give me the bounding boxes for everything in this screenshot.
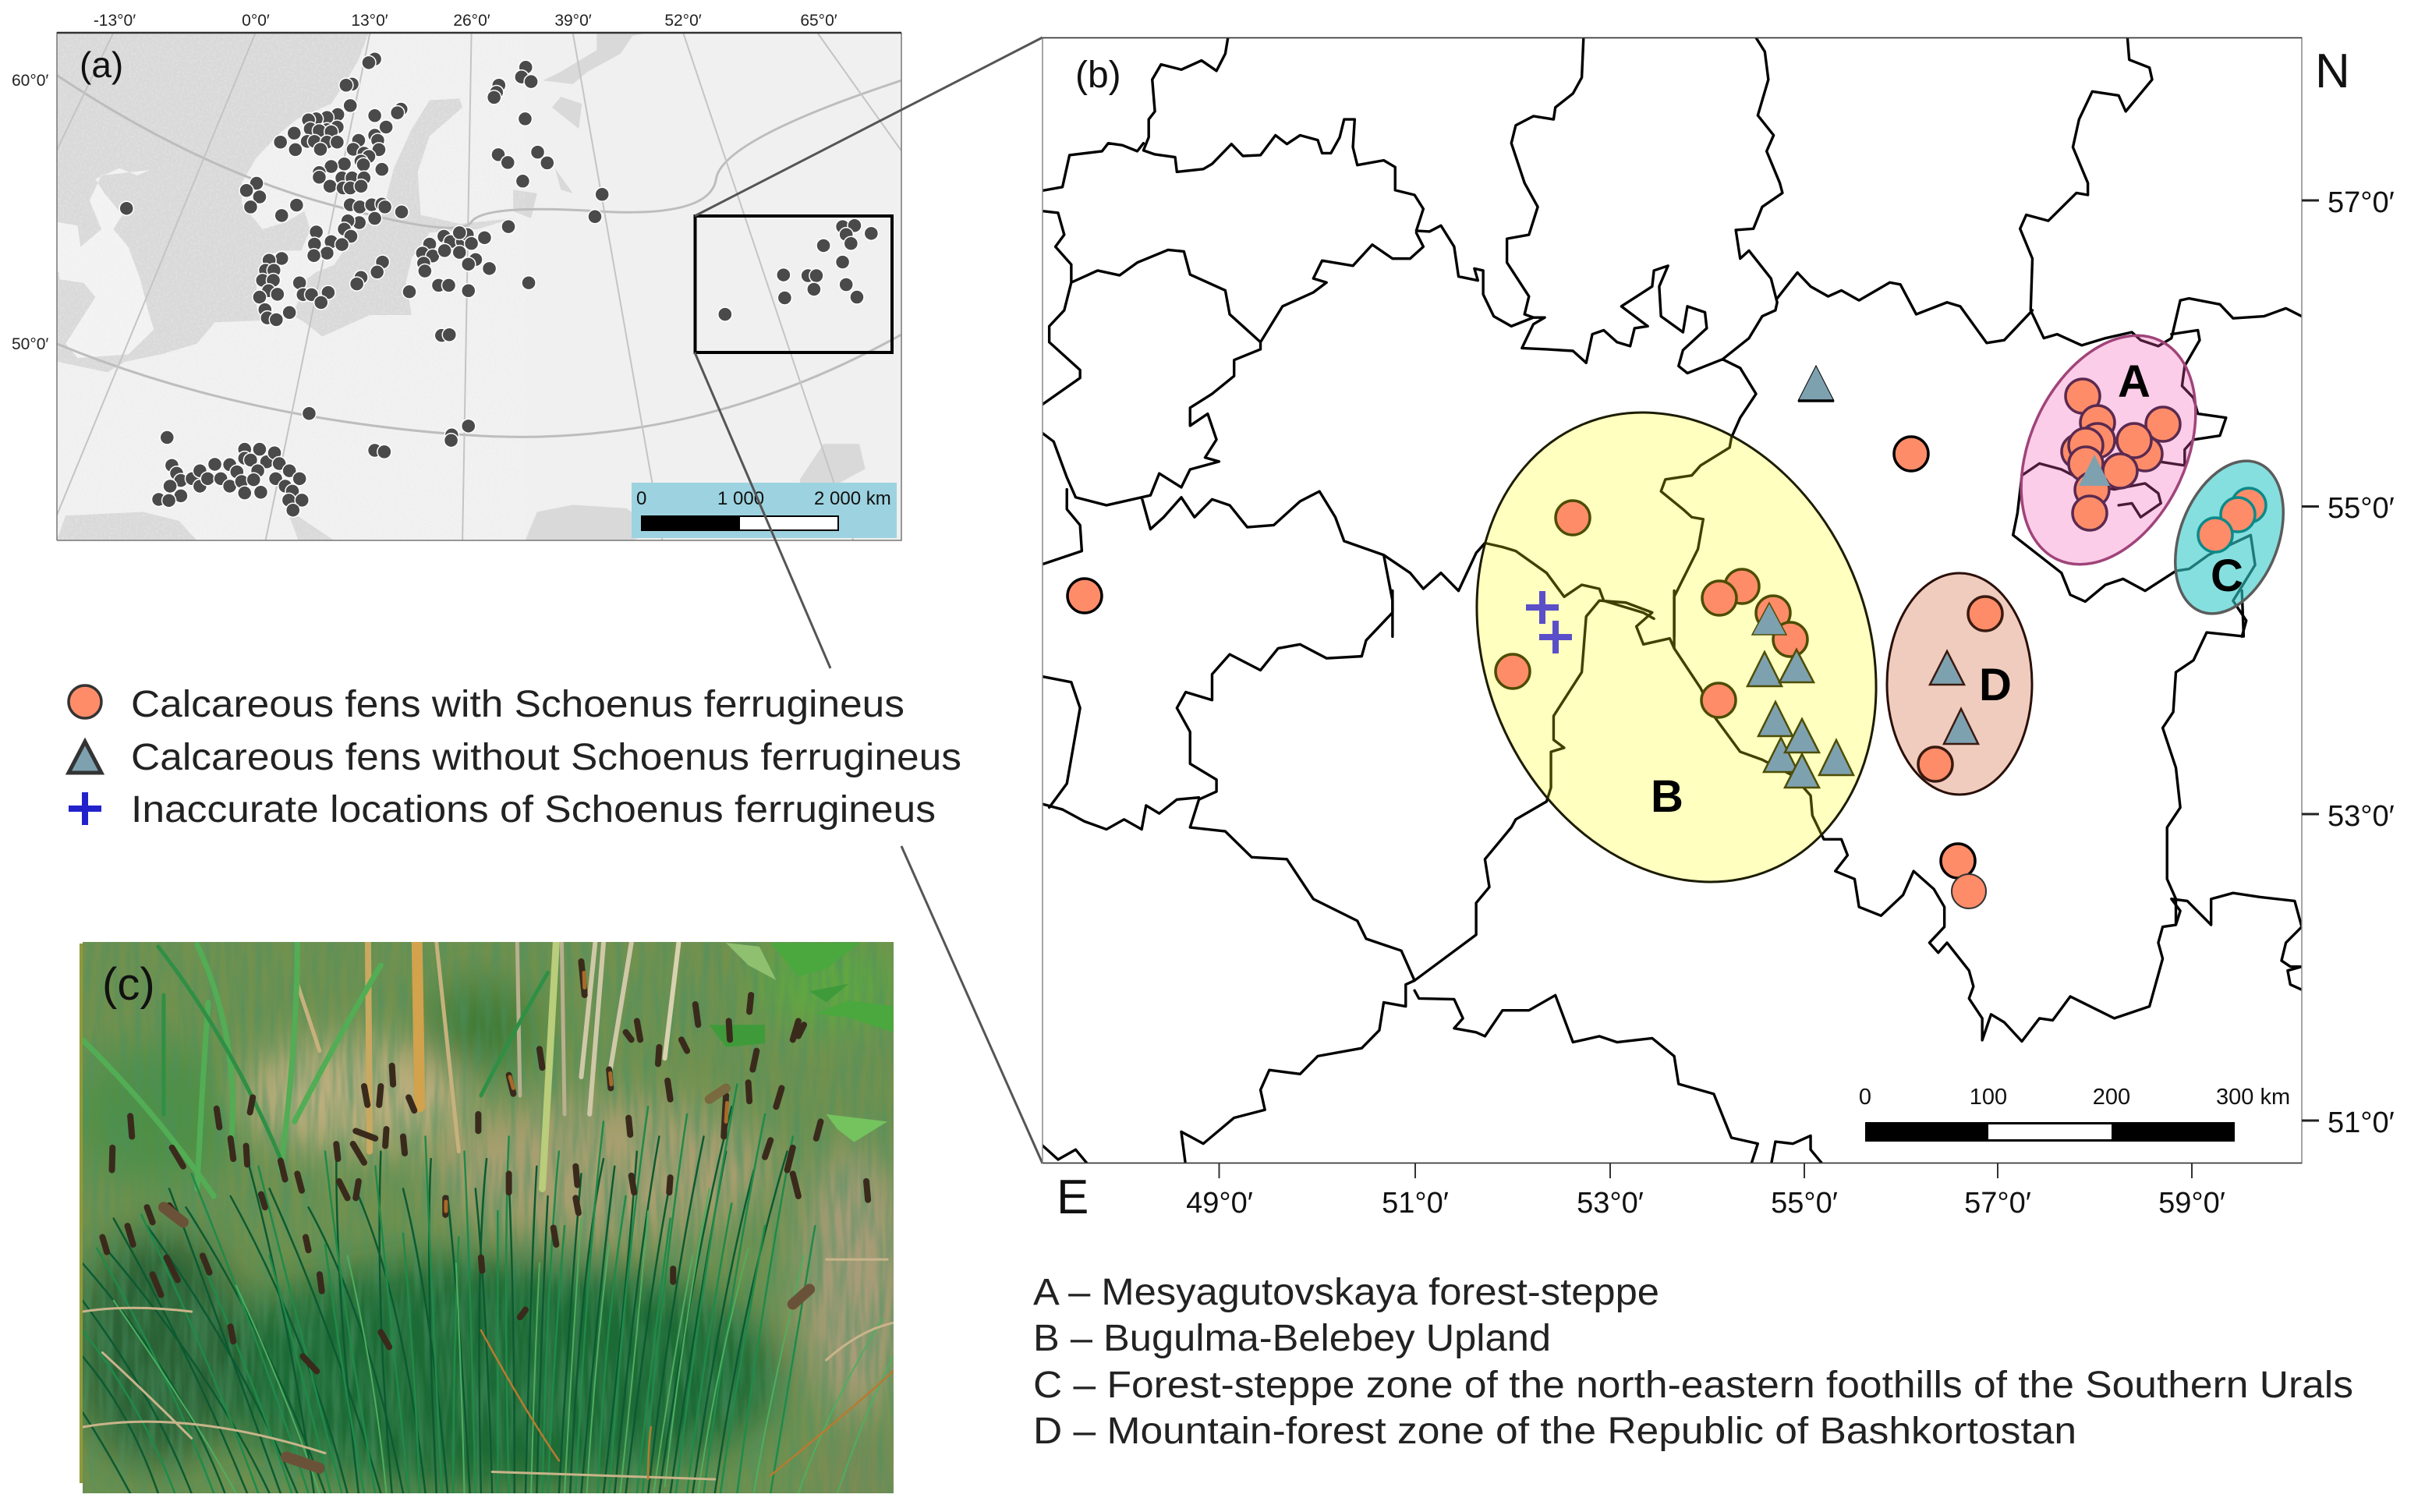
east axis letter: E bbox=[1057, 1170, 1089, 1224]
top longitude labels: 52°0′ bbox=[664, 12, 702, 30]
graticule lines bbox=[57, 33, 901, 540]
bottom longitude ticks and labels: 55°0′ bbox=[1771, 1187, 1838, 1220]
legend: zones A to D: B – Bugulma-Belebey Upland bbox=[1033, 1318, 1551, 1359]
top longitude labels: -13°0′ bbox=[94, 12, 136, 30]
scale bar (b) bbox=[1859, 1085, 2290, 1142]
panel (b) frame bbox=[1043, 37, 2302, 1163]
text: inaccurate locations: Inaccurate locations of Schoenus ferrugineus bbox=[131, 789, 936, 830]
legend: zones A to D: D – Mountain-forest zone of the Republic of Bashkortostan bbox=[1033, 1411, 2076, 1452]
panel (c) label: (c) bbox=[102, 959, 155, 1010]
zone letter labels bbox=[1651, 356, 2243, 822]
bottom longitude ticks and labels: 53°0′ bbox=[1577, 1187, 1644, 1220]
zone letter labels: C bbox=[2211, 551, 2243, 601]
leaves top right bbox=[770, 943, 893, 1032]
fen sites without Schoenus ferrugineus bbox=[1747, 366, 2110, 788]
tussock blades bbox=[83, 1107, 788, 1493]
left latitude labels: 50°0′ bbox=[12, 335, 48, 353]
zone B ellipse bbox=[1475, 412, 1878, 883]
icon: blue-grey triangle bbox=[69, 742, 101, 773]
scale bar (b): 100 bbox=[1970, 1085, 2007, 1110]
inaccurate location markers bbox=[1526, 591, 1572, 653]
fen sites with Schoenus ferrugineus bbox=[1067, 379, 2266, 908]
right latitude ticks and labels: 57°0′ bbox=[2328, 186, 2395, 219]
panel (a): Europe overview map bbox=[12, 12, 901, 540]
north axis letter: N bbox=[2315, 44, 2350, 98]
occurrence dots bbox=[119, 52, 878, 517]
scale bar (a): 1 000 bbox=[717, 488, 764, 509]
bottom longitude ticks and labels: 57°0′ bbox=[1964, 1187, 2031, 1220]
bottom longitude ticks and labels: 51°0′ bbox=[1382, 1187, 1449, 1220]
top longitude labels: 65°0′ bbox=[800, 12, 837, 30]
legend: zones A to D bbox=[1033, 1272, 2353, 1452]
bottom longitude ticks and labels: 49°0′ bbox=[1186, 1187, 1253, 1220]
connector lines from inset to panel b bbox=[695, 37, 1043, 1163]
administrative boundaries bbox=[1040, 37, 2302, 1166]
seed heads bbox=[102, 961, 868, 1371]
top longitude labels: 0°0′ bbox=[242, 12, 270, 30]
reed stems bbox=[368, 943, 370, 1152]
scale bar (b): 200 bbox=[2093, 1085, 2130, 1110]
panel (c): photo of Schoenus ferrugineus tussock bbox=[73, 941, 908, 1512]
tan litter stems bbox=[83, 1259, 893, 1479]
text: calcareous fens without: Calcareous fens without Schoenus ferrugineus bbox=[131, 737, 961, 778]
scale bar (b): 0 bbox=[1859, 1085, 1871, 1110]
panel (b): regional map bbox=[1040, 37, 2395, 1224]
legend: zones A to D: A – Mesyagutovskaya forest-steppe bbox=[1033, 1272, 1659, 1313]
top longitude labels: 26°0′ bbox=[453, 12, 490, 30]
bottom longitude ticks and labels: 59°0′ bbox=[2158, 1187, 2225, 1220]
zone C ellipse bbox=[2174, 459, 2285, 615]
inset rectangle bbox=[696, 216, 892, 352]
top longitude labels: 13°0′ bbox=[351, 12, 388, 30]
bottom longitude ticks and labels bbox=[1186, 1163, 2225, 1220]
icon: blue plus bbox=[69, 792, 101, 825]
zone letter labels: B bbox=[1651, 771, 1683, 822]
icon: orange circle bbox=[69, 685, 101, 718]
panel (a) label: (a) bbox=[80, 44, 123, 85]
scale bar (b): 300 km bbox=[2216, 1085, 2290, 1110]
scale bar (a) bbox=[632, 483, 897, 538]
right latitude ticks and labels: 55°0′ bbox=[2328, 492, 2395, 525]
left latitude labels: 60°0′ bbox=[12, 72, 48, 90]
scale bar (a): 2 000 km bbox=[814, 488, 891, 509]
legend: site types bbox=[69, 684, 961, 830]
right latitude ticks and labels: 53°0′ bbox=[2328, 800, 2395, 833]
text: calcareous fens with: Calcareous fens with Schoenus ferrugineus bbox=[131, 684, 905, 725]
right latitude ticks and labels bbox=[2302, 186, 2395, 1139]
panel (b) label: (b) bbox=[1075, 55, 1121, 96]
zone letter labels: D bbox=[1979, 660, 2012, 710]
right latitude ticks and labels: 51°0′ bbox=[2328, 1107, 2395, 1139]
zone A ellipse bbox=[2020, 334, 2197, 566]
zone D ellipse bbox=[1887, 573, 2032, 795]
top longitude labels: 39°0′ bbox=[554, 12, 592, 30]
zone letter labels: A bbox=[2118, 356, 2151, 407]
legend: zones A to D: C – Forest-steppe zone of the north-eastern foothills of the Southern Urals bbox=[1033, 1365, 2353, 1406]
top longitude labels bbox=[94, 12, 837, 30]
broad leaves bbox=[83, 943, 381, 1196]
scale bar (a): 0 bbox=[636, 488, 646, 509]
left latitude labels bbox=[12, 72, 48, 353]
